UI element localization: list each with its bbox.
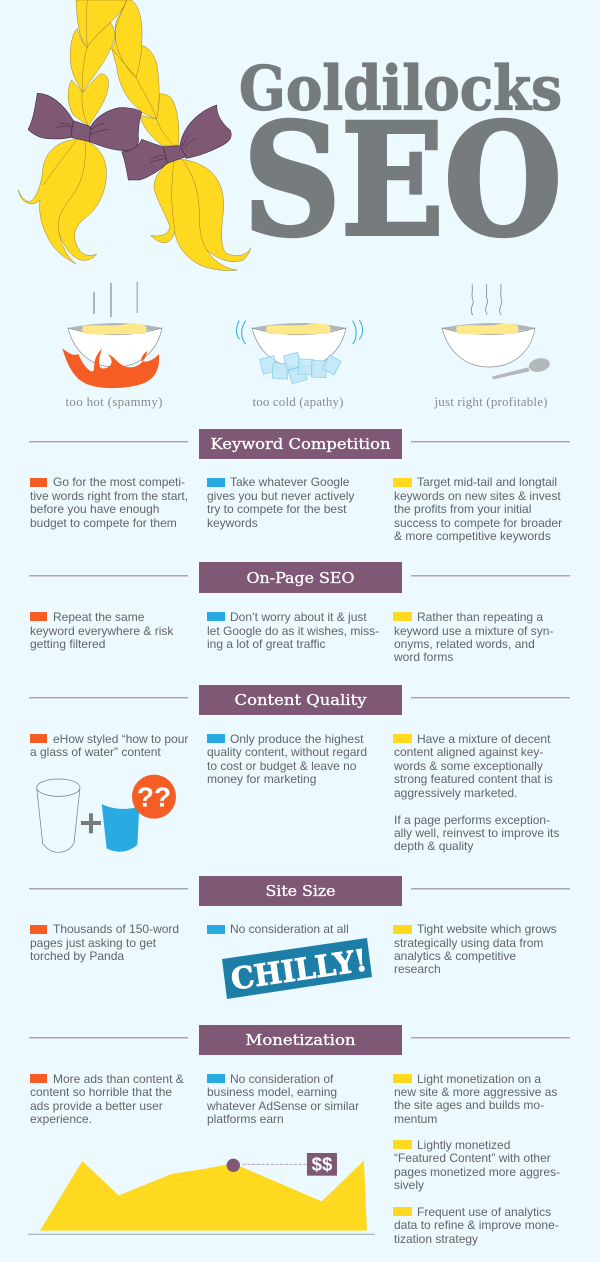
text: keyword just right: success to compete for broader: [394, 516, 562, 530]
title: Goldilocks: [239, 54, 562, 124]
text: monetization just right: data to refine & improve mone-: [394, 1218, 559, 1232]
panel: too hot bowl: [62, 282, 162, 409]
text: monetization too cold: whatever AdSense or similar: [206, 1099, 359, 1113]
text: monetization too cold: platforms earn: [207, 1112, 284, 1126]
text: content just right: ally well, reinvest to improve its: [394, 826, 559, 840]
section: Monetization: [29, 1025, 570, 1055]
text: on-page too cold: Don’t worry about it & just: [230, 610, 367, 624]
text: keyword too cold: [207, 475, 354, 530]
text: monetization just right: Light monetization on a: [417, 1072, 541, 1086]
text: content just right: words & some exceptionally: [393, 759, 543, 773]
text: keyword just right: [393, 475, 562, 543]
text: monetization just right: tization strategy: [394, 1232, 478, 1246]
section: On-Page SEO: [29, 562, 570, 593]
text: keyword just right: Target mid-tail and longtail: [417, 475, 557, 489]
text: site size too cold: No consideration at all: [230, 922, 349, 936]
illustration: glass plus blue cup question: [37, 775, 176, 852]
text: content just right: [393, 732, 559, 853]
text: monetization just right: “Featured Content” with other: [394, 1151, 551, 1165]
heading: Site Size: Site Size: [266, 882, 336, 900]
text: site size just right: research: [394, 962, 441, 976]
text: monetization too hot: experience.: [30, 1112, 92, 1126]
text: on-page too hot: [30, 610, 174, 651]
heading: Content Quality: Content Quality: [234, 691, 367, 709]
text: content just right: If a page performs exception-: [394, 813, 550, 827]
text: monetization too hot: content so horrible that the: [30, 1085, 172, 1099]
text: monetization just right: new site & more aggressive as: [394, 1085, 557, 1099]
text: keyword too hot: [30, 475, 188, 530]
text: on-page just right: word forms: [393, 650, 453, 664]
text: keyword just right: keywords on new sites & invest: [394, 489, 561, 503]
text: on-page too cold: [207, 610, 379, 651]
text: site size just right: analytics & competitive: [394, 949, 516, 963]
text: content just right: depth & quality: [394, 839, 473, 853]
section: Site Size: [29, 876, 570, 906]
text: keyword too hot: before you have enough: [30, 502, 159, 516]
text: monetization just right: mentum: [394, 1112, 437, 1126]
text: content too cold: Only produce the highest: [230, 732, 364, 746]
heading: Monetization: Monetization: [246, 1031, 356, 1049]
text: monetization just right: Lightly monetized: [417, 1138, 510, 1152]
title: SEO: [243, 90, 562, 271]
text: keyword too cold: keywords: [207, 516, 258, 530]
text: site size just right: Tight website which grows: [417, 922, 557, 936]
caption: too cold: too cold (apathy): [252, 394, 344, 409]
text: monetization just right: sively: [394, 1178, 424, 1192]
text: monetization too hot: [30, 1072, 184, 1126]
text: monetization too cold: [206, 1072, 359, 1126]
text: monetization too hot: ads provide a better user: [30, 1099, 163, 1113]
text: keyword too hot: tive words right from the start,: [30, 489, 188, 503]
text: monetization just right: the site ages and builds mo-: [394, 1098, 544, 1112]
text: content too hot: a glass of water” content: [30, 745, 161, 759]
illustration: golden braids with purple bows: [18, 0, 251, 271]
area chart with revenue marker: [28, 1153, 375, 1235]
text: content just right: strong featured content that is: [394, 772, 553, 786]
text: on-page too hot: keyword everywhere & risk: [30, 624, 174, 638]
text: monetization just right: pages monetized more aggres-: [394, 1165, 560, 1179]
heading: On-Page SEO: On-Page SEO: [246, 569, 354, 587]
text: content just right: aggressively marketed.: [394, 786, 517, 800]
text: content too cold: [207, 732, 367, 786]
heading: Keyword Competition: Keyword Competition: [210, 435, 391, 453]
caption: too hot: too hot (spammy): [66, 394, 162, 409]
text: on-page just right: Rather than repeating a: [417, 610, 543, 624]
text: keyword too hot: budget to compete for them: [30, 516, 177, 530]
panel: too cold bowl: [236, 320, 363, 409]
stamp: CHILLY!: CHILLY!: [229, 943, 370, 998]
text: site size too hot: torched by Panda: [30, 949, 124, 963]
text: keyword just right: the profits from your initial: [394, 502, 531, 516]
text: site size too hot: pages just asking to get: [30, 936, 157, 950]
text: content too hot: [30, 732, 188, 759]
text: monetization too hot: More ads than content &: [53, 1072, 184, 1086]
text: keyword too hot: Go for the most competi-: [53, 475, 185, 489]
section: Content Quality: [29, 685, 570, 715]
area chart with revenue marker: $$: [312, 1154, 333, 1175]
section: Keyword Competition: [29, 429, 570, 459]
text: on-page too cold: ing a lot of great traffic: [207, 637, 326, 651]
text: site size too hot: [30, 922, 179, 963]
text: content too hot: eHow styled “how to pour: [53, 732, 188, 746]
text: keyword too cold: gives you but never actively: [207, 489, 354, 503]
illustration: glass plus blue cup question: ??: [137, 782, 171, 813]
text: content just right: Have a mixture of decent: [417, 732, 551, 746]
text: site size just right: [393, 922, 557, 976]
text: on-page too cold: let Google do as it wishes, miss-: [207, 624, 379, 638]
text: on-page too hot: Repeat the same: [53, 610, 145, 624]
text: content just right: content aligned against key-: [394, 745, 543, 759]
text: site size too hot: Thousands of 150-word: [53, 922, 179, 936]
text: on-page too hot: getting filtered: [30, 637, 105, 651]
text: site size just right: strategically using data from: [394, 936, 543, 950]
text: content too cold: money for marketing: [207, 772, 316, 786]
text: monetization just right: [393, 1072, 560, 1246]
text: content too cold: quality content, without regard: [207, 745, 367, 759]
caption: just right: just right (profitable): [434, 394, 548, 409]
panel: just right bowl: [434, 284, 551, 409]
text: keyword just right: & more competitive keywords: [394, 529, 551, 543]
text: on-page just right: keyword use a mixture of syn-: [394, 624, 553, 638]
text: monetization too cold: No consideration of: [230, 1072, 334, 1086]
text: on-page just right: [393, 610, 553, 664]
text: keyword too cold: try to compete for the best: [207, 502, 347, 516]
text: content too cold: to cost or budget & leave no: [207, 759, 357, 773]
text: keyword too cold: Take whatever Google: [230, 475, 350, 489]
text: on-page just right: onyms, related words, and: [394, 637, 535, 651]
text: monetization too cold: business model, earning: [207, 1085, 337, 1099]
text: monetization just right: Frequent use of analytics: [417, 1205, 551, 1219]
